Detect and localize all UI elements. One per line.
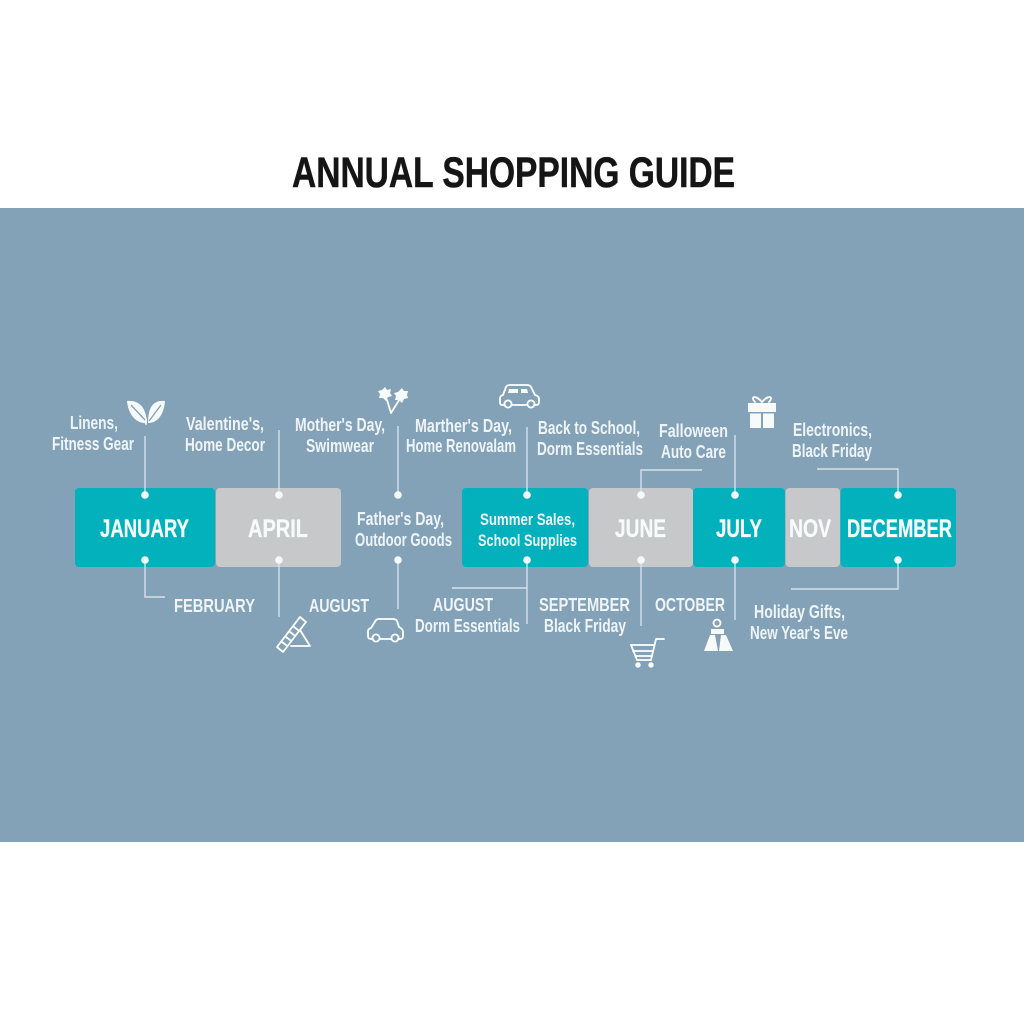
month block: June: JUNE <box>615 515 666 543</box>
month block: Summer Sales: School Supplies <box>478 532 577 550</box>
label: Linens, Fitness Gear: Fitness Gear <box>52 434 134 454</box>
month block: Summer Sales: Summer Sales, <box>480 511 575 529</box>
label: Electronics, Black Friday: Black Friday <box>792 441 872 461</box>
month block: July <box>693 488 785 567</box>
label: August: AUGUST <box>309 596 369 616</box>
label: Mother's Day, Swimwear: Swimwear <box>306 436 374 456</box>
label: Linens, Fitness Gear: Linens, <box>70 413 118 433</box>
icon: flowers <box>378 387 408 413</box>
label: Father's Day, Outdoor Goods: Outdoor Goods <box>355 530 452 550</box>
label: October: OCTOBER <box>655 595 725 615</box>
icon: shopping bags <box>704 620 733 651</box>
icon: ruler and set square <box>277 617 310 652</box>
label: Marther's Day, Home Renovation: Marther's Day, <box>415 416 512 436</box>
label: Marther's Day, Home Renovation <box>406 416 516 456</box>
label: Mother's Day, Swimwear <box>295 415 385 456</box>
label: Holiday Gifts, New Year's Eve <box>750 602 848 643</box>
month block: December: DECEMBER <box>847 515 952 543</box>
label: Linens, Fitness Gear <box>52 413 134 454</box>
label: Valentine's, Home Decor: Valentine's, <box>186 414 264 434</box>
label: August, Dorm Essentials: Dorm Essentials <box>415 616 520 636</box>
month block: January <box>75 488 215 567</box>
icon: car bottom <box>368 619 403 642</box>
month block: December <box>840 488 956 567</box>
month block: Summer Sales <box>462 488 588 567</box>
month block: June <box>589 488 693 567</box>
month block: July: JULY <box>716 515 762 543</box>
icon: shopping cart <box>631 639 664 667</box>
label: August, Dorm Essentials <box>415 595 520 636</box>
month block: January: JANUARY <box>100 515 189 543</box>
label: Back to School, Dorm Essentials: Dorm Essentials <box>537 439 643 459</box>
label: August, Dorm Essentials: AUGUST <box>433 595 493 615</box>
title: ANNUAL SHOPPING GUIDE <box>292 149 735 197</box>
month block: Nov: NOV <box>789 515 831 543</box>
icon: car top <box>500 385 539 408</box>
panel: timeline background <box>0 208 1024 842</box>
label: Falloween, Auto Care: Falloween <box>659 421 728 441</box>
label: Holiday Gifts, New Year's Eve: Holiday Gifts, <box>754 602 845 622</box>
label: Back to School, Dorm Essentials <box>537 418 643 459</box>
timeline month bar <box>75 488 956 567</box>
label: September, Black Friday <box>539 595 630 636</box>
label: Holiday Gifts, New Year's Eve: New Year's Eve <box>750 623 848 643</box>
label: Electronics, Black Friday <box>792 420 872 461</box>
label: Falloween, Auto Care: Auto Care <box>661 442 726 462</box>
label: September, Black Friday: Black Friday <box>544 616 626 636</box>
label: Father's Day, Outdoor Goods: Father's Day, <box>357 509 444 529</box>
month block: April: APRIL <box>248 515 308 543</box>
label: Father's Day, Outdoor Goods <box>355 509 452 550</box>
label: Falloween, Auto Care <box>659 421 728 462</box>
label: Marther's Day, Home Renovation: Home Renovalam <box>406 436 516 456</box>
month block: April <box>216 488 341 567</box>
label: Mother's Day, Swimwear: Mother's Day, <box>295 415 385 435</box>
label: Valentine's, Home Decor <box>185 414 265 455</box>
label: Back to School, Dorm Essentials: Back to School, <box>538 418 640 438</box>
label: September, Black Friday: SEPTEMBER <box>539 595 630 615</box>
connector lines and dots <box>141 426 902 626</box>
label: February: FEBRUARY <box>174 596 255 616</box>
icon: gift box <box>748 397 776 428</box>
month block: Nov <box>786 488 840 567</box>
label: Electronics, Black Friday: Electronics, <box>793 420 872 440</box>
label: Valentine's, Home Decor: Home Decor <box>185 435 265 455</box>
icon: leaves <box>127 401 165 424</box>
